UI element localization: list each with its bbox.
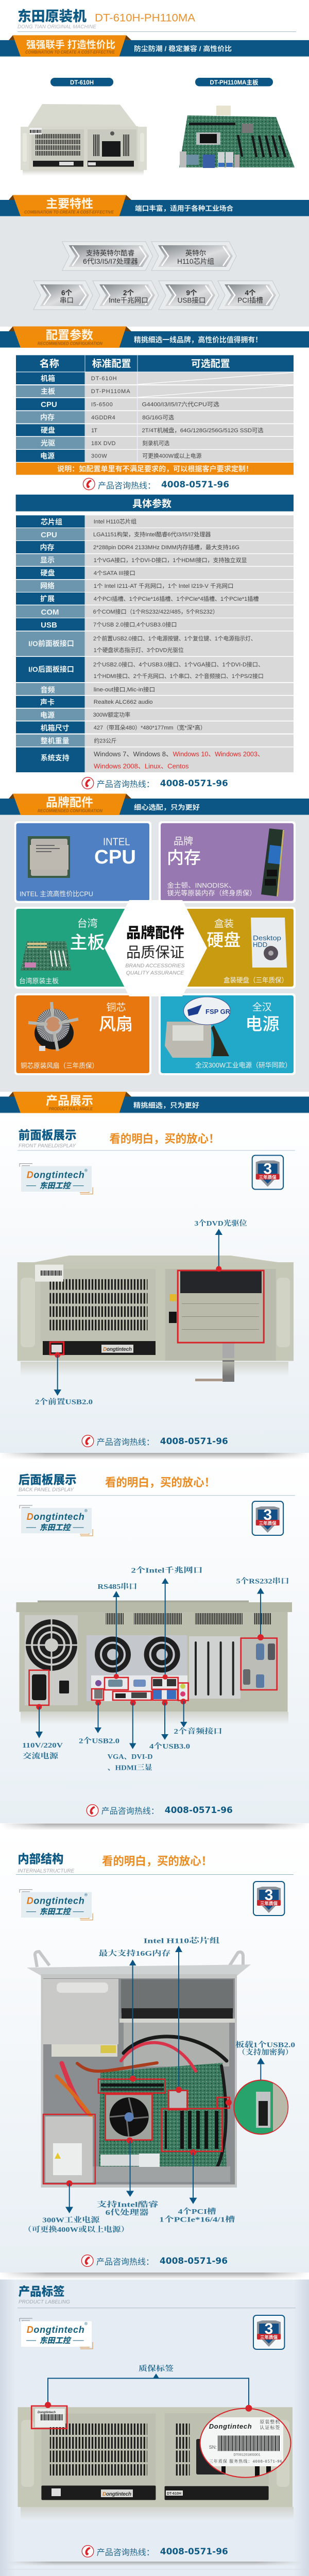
- table: standard configuration: 可选配置: [191, 358, 230, 369]
- title block: DONG TIAN ORIGINAL MACHINE: [18, 24, 96, 30]
- card: hard disk: 盒装: [214, 918, 234, 929]
- chevron: chipset: [151, 242, 236, 270]
- table: standard configuration: 可更换400W或以上电源: [142, 452, 201, 460]
- logo: [20, 1505, 93, 1536]
- callout: network: [131, 1566, 203, 1680]
- section heading: back panel: [17, 1473, 295, 1496]
- section heading: front panel: [18, 1128, 295, 1151]
- logo: ®: [84, 1893, 88, 1897]
- banner: key features: COMBINATION TO CREATE A COST-EFFECTIVE: [24, 210, 114, 214]
- badge: 3-year warranty: 3: [265, 1887, 273, 1904]
- table: standard configuration: 刻录机可选: [142, 439, 169, 447]
- table: detailed parameters: 300W额定功率: [93, 711, 130, 718]
- banner: combination: 强强联手 打造性价比: [26, 39, 115, 50]
- section heading: product labeling: [18, 2285, 296, 2308]
- table: detailed parameters: I/O前面板接口: [28, 639, 74, 648]
- table: standard configuration: DT-610H: [91, 376, 117, 382]
- callout: network: 2个Intel千兆网口: [131, 1566, 203, 1575]
- banner: product display: PRODUCT FULL ANGLE: [48, 1107, 93, 1111]
- badge: 3-year warranty: 3: [263, 1506, 272, 1523]
- banner: configuration: 精挑细选一线品牌，高性价比值得拥有！: [134, 336, 262, 344]
- callout: power supply: 300W工业电源: [42, 2215, 100, 2224]
- table: detailed parameters: USB: [41, 621, 57, 630]
- table: detailed parameters: 1个硬盘状态指示灯、3个DVD光驱位: [94, 647, 184, 654]
- logo: 东田工控: [39, 1908, 72, 1917]
- table: standard configuration: DT-PH110MA: [91, 388, 130, 395]
- callout: display outputs: 、HDMI三显: [108, 1764, 152, 1772]
- section heading: internal structure: 内部结构: [18, 1852, 63, 1866]
- chevron: serial ports: 串口: [60, 297, 74, 304]
- small warranty sticker: Dongtintech: [38, 2411, 56, 2414]
- hotline: [81, 2255, 228, 2267]
- table: standard configuration: 名称: [40, 358, 59, 369]
- table: detailed parameters: I/O后面板接口: [28, 665, 74, 673]
- hotline: 产品咨询热线：: [98, 481, 156, 490]
- callout: RS485: RS485串口: [97, 1582, 137, 1591]
- table: standard configuration: 2T/4T机械盘，64G/128G/256G/512G SSD可选: [142, 427, 264, 434]
- callout: onboard USB: 板载1个USB2.0: [235, 2040, 295, 2049]
- logo: [20, 2318, 93, 2349]
- table: detailed parameters: 显示: [40, 556, 55, 564]
- chevron: serial ports: [33, 281, 93, 310]
- callout: warranty label bracket: 质保标签: [139, 2364, 174, 2373]
- front chassis with warranty label: [18, 2402, 294, 2520]
- table: detailed parameters: COM: [41, 608, 59, 617]
- table: detailed parameters: Windows 2008、Linux、Centos: [94, 762, 189, 770]
- card: memory: 内存: [167, 848, 201, 867]
- table: detailed parameters: 声卡: [40, 698, 55, 706]
- card: motherboard: [14, 907, 151, 989]
- back panel photo: [16, 1600, 292, 1725]
- card: hard disk: 盒装硬盘（三年质保）: [224, 976, 288, 984]
- hotline: [82, 777, 228, 789]
- panel: brand parts background: [0, 815, 309, 1092]
- section heading: product labeling: PRODUCT LABELING: [19, 2299, 70, 2305]
- callout: RS232: [236, 1577, 289, 1640]
- zoom circle: onboard USB: [234, 2080, 288, 2134]
- chassis photo: [21, 104, 147, 176]
- table: detailed parameters: 扩展: [40, 595, 55, 603]
- badge: 3-year warranty: 三年质保: [259, 1175, 277, 1180]
- section heading: back panel: 后面板展示: [19, 1473, 77, 1486]
- logo: [20, 1164, 93, 1194]
- table: standard configuration: 18X DVD: [91, 440, 116, 447]
- banner: brand parts: 细心选配，只为更好: [134, 804, 200, 811]
- table: standard configuration: 主板: [41, 387, 55, 396]
- callout: power supply: （可更换400W或以上电源）: [23, 2225, 129, 2234]
- chevron: CPU support: [62, 242, 152, 270]
- table: detailed parameters: 整机重量: [41, 737, 70, 745]
- chevron: USB ports: 9个: [186, 289, 197, 297]
- title block: DT-610H-PH110MA: [95, 12, 195, 24]
- logo: ®: [84, 2321, 88, 2326]
- table: standard configuration: 4GDDR4: [91, 415, 115, 421]
- banner: key features: [0, 195, 309, 216]
- red highlights: [98, 2079, 230, 2151]
- table: detailed parameters: 内存: [40, 543, 55, 551]
- table: standard configuration: CPU: [41, 400, 57, 409]
- hotline: 产品咨询热线：: [96, 2258, 154, 2267]
- icon: CPU cooler: [28, 1002, 78, 1051]
- table: standard configuration: 内存: [40, 413, 55, 421]
- table: standard configuration: 1T: [91, 428, 97, 434]
- callout: power supply: [23, 2180, 129, 2234]
- card: power: 全汉: [252, 1002, 272, 1013]
- table: detailed parameters: 系统支持: [41, 754, 70, 762]
- hotline: 产品咨询热线：: [97, 2548, 154, 2557]
- icon: hard disk box: [251, 918, 287, 968]
- hotline: 产品咨询热线：: [97, 780, 154, 789]
- power supply: [45, 2116, 93, 2182]
- chevron: chipset: H110芯片组: [177, 258, 214, 265]
- table: detailed parameters: 芯片组: [41, 518, 62, 526]
- table: detailed parameters: 音频: [40, 686, 55, 694]
- small warranty sticker: [31, 2406, 67, 2429]
- chevron: PCI slots: [218, 281, 280, 310]
- section heading: front panel: 看的明白，买的放心！: [109, 1132, 219, 1145]
- callout: AC power: [22, 1704, 63, 1760]
- table: detailed parameters: [16, 495, 294, 772]
- table: detailed parameters: Windows 7、Windows 8、: [94, 750, 173, 758]
- motherboard photo: [179, 106, 295, 168]
- panel: product label background: [0, 2279, 309, 2576]
- callout: onboard USB: [226, 2040, 295, 2106]
- table: detailed parameters: 427（带耳朵480）*480*177mm（宽*深*高）: [94, 724, 206, 731]
- hotline: 产品咨询热线：: [101, 1806, 159, 1816]
- table: detailed parameters: line-out接口,Mic-in接口: [94, 686, 155, 693]
- section heading: back panel: 看的明白，买的放心！: [105, 1476, 215, 1489]
- pill: DT-610H: [50, 78, 113, 87]
- table: standard configuration: 机箱: [41, 374, 55, 382]
- callout: USB 2.0: [79, 1700, 119, 1745]
- hotline: 产品咨询热线：: [97, 1437, 154, 1447]
- callout: memory: 最大支持16G内存: [98, 1949, 170, 1958]
- table: standard configuration: 光驱: [41, 439, 55, 447]
- card: power: [159, 993, 296, 1075]
- callout arrows: back panel: [22, 1566, 289, 1772]
- card: memory: 品牌: [174, 836, 193, 847]
- panel: internal background: [0, 1831, 309, 2273]
- banner: brand parts: RECOMMENDED CONFIGURATION: [38, 809, 102, 813]
- callout: RS232: 5个RS232串口: [236, 1577, 289, 1586]
- hotline: 4008-0571-96: [160, 778, 228, 789]
- logo: 东田工控: [39, 1182, 72, 1191]
- card: power: 电源: [245, 1014, 279, 1033]
- table: detailed parameters: Windows 10、Windows 2003、: [173, 750, 264, 758]
- table: detailed parameters: 1个 Intel I211-AT 千兆网口，1个 Intel I219-V 千兆网口: [94, 583, 234, 589]
- section heading: internal structure: INTERNALSTRUCTURE: [18, 1868, 75, 1874]
- table: standard configuration: 电源: [40, 452, 55, 460]
- table: detailed parameters: 6个COM接口（1个RS232/422/485，5个RS232）: [93, 608, 218, 615]
- callout: memory: [98, 1949, 170, 2082]
- banner: key features: 端口丰富，适用于各种工业场合: [135, 205, 233, 212]
- hotline: [82, 1435, 228, 1447]
- callout: USB 3.0: [149, 1700, 190, 1751]
- hotline: 4008-0571-96: [160, 1436, 228, 1447]
- internal structure photo: [27, 1952, 251, 2188]
- badge: 3-year warranty: [253, 2315, 284, 2349]
- card: motherboard: 主板: [70, 933, 105, 953]
- panel: front panel background: [0, 1113, 309, 1453]
- card: CPU: INTEL: [103, 837, 130, 848]
- card: memory: [159, 821, 296, 903]
- card: motherboard: 台湾原装主板: [19, 977, 59, 985]
- section heading: front panel: FRONT PANELDISPLAY: [19, 1143, 76, 1149]
- callout: PCI: [159, 2149, 235, 2224]
- logo: 东田工控: [39, 2336, 72, 2345]
- table: detailed parameters: 7个USB 2.0接口,4个USB3.0接口: [93, 621, 177, 628]
- table: standard configuration: I5-6500: [91, 402, 113, 408]
- front panel photo: Dongtintech: [103, 1347, 132, 1352]
- banner: brand parts: [0, 793, 309, 815]
- icon: RAM stick: [261, 828, 284, 896]
- callout: CPU: 支持Intel酷睿: [97, 2200, 159, 2209]
- hotline: [87, 1805, 233, 1816]
- chevron: PCI slots: 4个: [245, 289, 256, 297]
- badge: 3-year warranty: 3: [265, 2320, 273, 2337]
- banner: combination: COMBINATION TO CREATE A COST-EFFECTIVE: [25, 50, 115, 55]
- icon: cpu chip: [28, 836, 70, 878]
- section heading: product labeling: 产品标签: [19, 2285, 65, 2298]
- chevron: PCI slots: PCI插槽: [237, 297, 263, 304]
- callout: audio: 2个音频接口: [174, 1727, 222, 1736]
- table: standard configuration: [16, 355, 294, 462]
- table: detailed parameters: 4个PCI插槽、1个PCIe*16插槽、1个PCIe*4插槽、1个PCIe*1插槽: [94, 595, 259, 602]
- section heading: internal structure: [16, 1852, 294, 1875]
- zoom ellipse: warranty label: 三年质保 服务热线：4008-0571-96: [209, 2459, 282, 2464]
- table: detailed parameters: 约23公斤: [94, 738, 116, 744]
- logo: ®: [84, 1509, 88, 1513]
- banner: configuration: 配置参数: [46, 328, 93, 342]
- callout: onboard USB: （支持加密狗）: [237, 2048, 293, 2057]
- icon: power supply: [165, 997, 231, 1058]
- table: detailed parameters: LGA1151构架，支持Intel酷睿6代I3/I5/I7处理器: [93, 531, 211, 538]
- front chassis with warranty label: Dongtintech: [102, 2492, 131, 2497]
- callout: PCI: 4个PCI槽: [178, 2207, 216, 2216]
- icon: motherboard: [21, 941, 71, 971]
- zoom ellipse: warranty label: Dongtintech: [209, 2422, 252, 2430]
- section heading: internal structure: 看的明白，买的放心！: [102, 1855, 212, 1868]
- pill: DT-610H: DT-610H: [70, 80, 94, 86]
- badge: 3-year warranty: [253, 1882, 284, 1916]
- PCI slot covers: [189, 1636, 241, 1699]
- front chassis with warranty label: DT-610H: [167, 2492, 181, 2496]
- hexagon badge: [105, 900, 207, 996]
- table: standard configuration: 标准配置: [92, 358, 131, 369]
- shadow strip: [4, 2273, 305, 2279]
- front panel photo: [18, 1256, 294, 1382]
- banner: product display: 产品展示: [46, 1094, 93, 1107]
- note bar: 说明：如配置单里有不满足要求的，可以根据客户要求定制！: [57, 465, 253, 473]
- icon: hard disk box: Desktop: [253, 934, 281, 942]
- card: motherboard: 台湾: [77, 918, 98, 929]
- table: detailed parameters: 1个HDMI接口、2个千兆网口、1个串口、2个音频接口、1个PS/2接口: [94, 672, 264, 680]
- card: CPU: [14, 821, 151, 903]
- callout: USB 2.0: 2个USB2.0: [79, 1736, 119, 1745]
- icon: power supply: FSP GR: [205, 1008, 231, 1015]
- card: hard disk: 硬盘: [207, 930, 241, 950]
- hotline: 4008-0571-96: [165, 1805, 233, 1816]
- hexagon badge: BRAND ACCESSORIES: [125, 962, 185, 969]
- card: hard disk: [159, 907, 296, 989]
- badge: 3-year warranty: [252, 1155, 283, 1189]
- chassis fans: [95, 1636, 180, 1672]
- zoom ellipse: warranty label: 认证标签: [260, 2425, 280, 2430]
- table: detailed parameters: 具体参数: [132, 498, 171, 510]
- banner: combination: [0, 35, 309, 57]
- logo: Dongtintech: [27, 2325, 84, 2335]
- hexagon badge: QUALITY ASSURANCE: [126, 970, 184, 976]
- shadow strip: [5, 1824, 304, 1829]
- callout: chipset: [144, 1937, 220, 2093]
- callout: chipset: Intel H110芯片组: [144, 1937, 220, 1945]
- callout: audio: [174, 1699, 222, 1736]
- title block: 东田原装机: [18, 8, 87, 24]
- chevron: CPU support: 支持英特尔酷睿: [86, 249, 135, 257]
- table: detailed parameters: 网络: [40, 582, 55, 590]
- chevron: chipset: 英特尔: [185, 249, 206, 257]
- pill: motherboard: [195, 78, 273, 87]
- logo: Dongtintech: [27, 1512, 84, 1522]
- chevron: USB ports: [159, 281, 219, 310]
- banner: brand parts: 品牌配件: [46, 795, 93, 809]
- shadow strip: [13, 2562, 296, 2565]
- callout: DVD bays: 3个DVD光驱位: [195, 1219, 247, 1228]
- CPU cooler: [106, 2095, 151, 2140]
- section heading: front panel: 前面板展示: [19, 1128, 77, 1142]
- panel: back panel background: [0, 1460, 309, 1823]
- hotline: [82, 2546, 228, 2557]
- table: detailed parameters: Intel H110芯片组: [94, 518, 136, 525]
- table: detailed parameters: 机箱尺寸: [41, 724, 70, 732]
- table: detailed parameters: 1个VGA接口，1个DVI-D接口，1个HDMI接口，支持独立双显: [94, 556, 247, 564]
- title block: [18, 8, 296, 32]
- hexagon badge: 品牌配件: [126, 925, 184, 941]
- callout: display outputs: VGA、DVI-D: [108, 1753, 153, 1761]
- zoom ellipse: warranty label: [196, 2409, 290, 2478]
- table: standard configuration: 300W: [91, 453, 107, 460]
- card: power: 全汉300W工业电源（研华同款）: [195, 1061, 291, 1069]
- badge: 3-year warranty: 三年质保: [260, 1901, 278, 1906]
- chevron: USB ports: USB接口: [178, 296, 205, 304]
- table: detailed parameters: 2*288pin DDR4 2133MHz DIMM内存插槽，最大支持16G: [93, 544, 239, 551]
- table: detailed parameters: 硬盘: [40, 569, 55, 577]
- table: standard configuration: 硬盘: [41, 426, 55, 434]
- banner: configuration: [0, 327, 309, 348]
- zoom ellipse: warranty label: 原装整机: [260, 2419, 280, 2425]
- callout: RS485: [97, 1582, 137, 1679]
- callout: CPU: [97, 2138, 159, 2217]
- table: standard configuration: 8G/16G可选: [142, 414, 174, 421]
- zoom ellipse: warranty label: DT001201803301: [233, 2453, 261, 2456]
- chevron: network ports: Inte千兆网口: [109, 297, 148, 304]
- logo: Dongtintech: [27, 1170, 84, 1180]
- red port highlights: [29, 1638, 277, 1705]
- panel: features background: [0, 216, 309, 327]
- banner: combination: 防尘防潮 / 稳定兼容 / 高性价比: [134, 45, 232, 53]
- card: CPU: CPU: [94, 846, 136, 868]
- icon: hard disk box: HDD: [253, 941, 267, 948]
- badge: 3-year warranty: 三年质保: [259, 1521, 277, 1526]
- section heading: back panel: BACK PANEL DISPLAY: [19, 1486, 74, 1493]
- table: detailed parameters: Realtek ALC662 audio: [94, 699, 153, 705]
- callout: front USB: [35, 1352, 93, 1406]
- table: standard configuration: G4400/I3/I5/I7六代CPU可选: [142, 401, 219, 408]
- table: detailed parameters: 电源: [40, 711, 55, 719]
- callout: display outputs: [108, 1700, 153, 1772]
- card: memory: 镁光等原装内存（终身质保）: [167, 889, 256, 897]
- logo: Dongtintech: [27, 1896, 84, 1906]
- card: fan: 铜芯原装风扇（三年质保）: [21, 1062, 98, 1070]
- banner: product display: [0, 1092, 309, 1113]
- badge: 3-year warranty: 3: [263, 1160, 272, 1178]
- chevron: network ports: 2个: [123, 289, 134, 297]
- hotline: [83, 478, 229, 490]
- callout: AC power: 110V/220V: [22, 1742, 63, 1750]
- pill: motherboard: DT-PH110MA主板: [210, 79, 259, 86]
- table: detailed parameters: 4个SATA III接口: [94, 570, 135, 577]
- callout: DVD bays: [195, 1219, 247, 1272]
- badge: 3-year warranty: 三年质保: [260, 2335, 278, 2340]
- chevron: network ports: [93, 281, 159, 310]
- chevron: serial ports: 6个: [61, 289, 73, 297]
- note bar: [16, 463, 294, 475]
- banner: key features: 主要特性: [46, 197, 93, 210]
- logo: [20, 1890, 93, 1920]
- table: detailed parameters: 2个USB2.0接口、4个USB3.0接口、1个VGA接口、1个DVI-D接口、: [93, 661, 264, 668]
- feature chevrons: [33, 242, 280, 310]
- hotline: 4008-0571-96: [161, 480, 229, 490]
- card: fan: 风扇: [99, 1014, 133, 1033]
- callout: PCI: 1个PCIe*16/4/1槽: [159, 2215, 235, 2224]
- callout: AC power: 交流电源: [23, 1752, 59, 1760]
- chevron: CPU support: 6代I3/I5/I7处理器: [83, 258, 139, 265]
- card: memory: 金士顿、INNODISK、: [167, 882, 236, 889]
- callouts: internal: [23, 1937, 295, 2234]
- hotline: 4008-0571-96: [160, 2547, 228, 2557]
- shadow strip: [4, 1453, 305, 1459]
- logo: 东田工控: [39, 1523, 72, 1532]
- hotline: 4008-0571-96: [160, 2256, 228, 2266]
- banner: product display: 精挑细选，只为更好: [133, 1101, 199, 1109]
- power supply and fan: [25, 1615, 78, 1705]
- hexagon badge: 品质保证: [126, 944, 184, 960]
- PCI slots on board: [165, 2111, 218, 2149]
- card: fan: [14, 993, 151, 1075]
- callout: warranty label bracket: [48, 2364, 249, 2408]
- callout: front USB: 2个前置USB2.0: [35, 1398, 93, 1406]
- callout: USB 3.0: 4个USB3.0: [149, 1742, 190, 1751]
- callout: CPU: 6代处理器: [106, 2208, 149, 2217]
- zoom ellipse: warranty label: SN:: [209, 2445, 217, 2450]
- card: CPU: INTEL 主流高性价比CPU: [20, 890, 93, 897]
- badge: 3-year warranty: [252, 1501, 283, 1535]
- card: fan: 铜芯: [106, 1002, 126, 1013]
- logo: ®: [84, 1168, 88, 1173]
- cables: [57, 2037, 227, 2169]
- table: detailed parameters: 2个前置USB2.0接口、1个电源按键、1个复位键、1个电源指示灯、: [93, 635, 256, 642]
- banner: configuration: RECOMMENDED CONFIGURATION: [38, 341, 102, 346]
- table: detailed parameters: CPU: [41, 531, 57, 539]
